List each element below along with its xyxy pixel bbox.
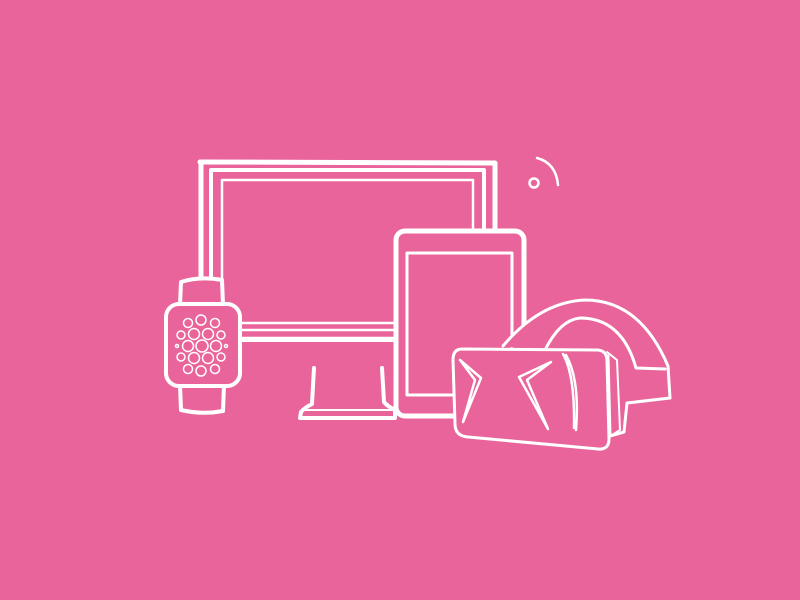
icon: tablet (396, 231, 524, 416)
icon: VR headset (453, 300, 670, 449)
icon: smartwatch (166, 278, 240, 413)
icon: monitor (200, 162, 495, 418)
icon: wifi signal (530, 158, 558, 188)
